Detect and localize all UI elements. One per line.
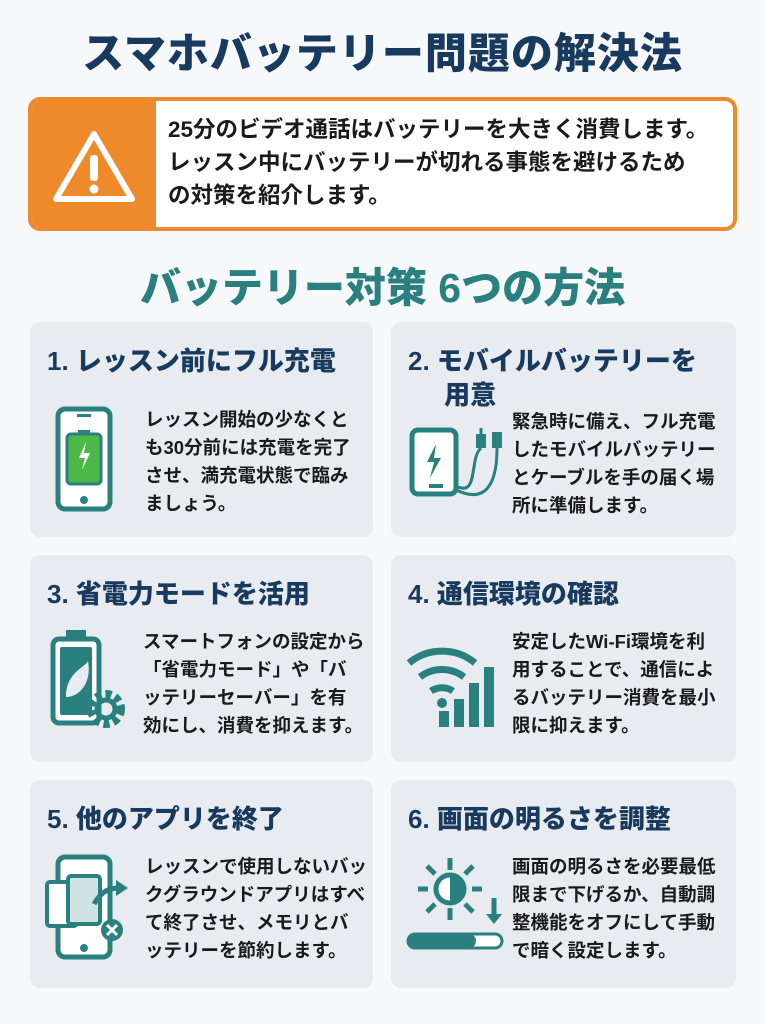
panel: 1 full charge: 1. レッスン前にフル充電 bbox=[47, 346, 336, 376]
callout: warning bbox=[28, 97, 737, 231]
text: 用することで、通信によ bbox=[512, 659, 714, 680]
text bbox=[512, 856, 716, 961]
icon: brightness down bbox=[406, 858, 504, 950]
text: るバッテリー消費を最小 bbox=[512, 687, 716, 708]
text: 限まで下げるか、自動調 bbox=[512, 884, 715, 905]
text: とケーブルを手の届く場 bbox=[512, 467, 714, 488]
text: も30分前には充電を完了 bbox=[145, 437, 351, 458]
text bbox=[512, 631, 716, 736]
text bbox=[143, 631, 364, 736]
panel: 2 mobile battery: 用意 bbox=[444, 380, 496, 410]
callout text bbox=[168, 117, 708, 208]
panel: 6 brightness bbox=[391, 780, 736, 988]
text: レッスンで使用しないバッ bbox=[145, 856, 367, 877]
text: したモバイルバッテリー bbox=[512, 439, 716, 460]
text bbox=[145, 856, 367, 961]
panel: 1 full charge bbox=[30, 322, 373, 537]
callout text: レッスン中にバッテリーが切れる事態を避けるため bbox=[168, 150, 686, 175]
text: 緊急時に備え、フル充電 bbox=[512, 411, 716, 432]
icon: phone apps close bbox=[45, 854, 128, 960]
text: 限に抑えます。 bbox=[512, 715, 640, 736]
text: ましょう。 bbox=[145, 493, 236, 514]
text: 画面の明るさを必要最低 bbox=[512, 856, 716, 877]
text: ッテリーセーバー」を有 bbox=[143, 687, 346, 708]
subtitle: バッテリー対策 6つの方法 bbox=[140, 265, 625, 311]
callout text: 25分のビデオ通話はバッテリーを大きく消費します。 bbox=[168, 117, 708, 142]
panel: 5 close apps: 5. 他のアプリを終了 bbox=[47, 804, 284, 834]
callout text: の対策を紹介します。 bbox=[168, 183, 391, 208]
panel: 4 network bbox=[391, 555, 736, 762]
text: スマートフォンの設定から bbox=[143, 631, 364, 652]
text: 「省電力モード」や「バ bbox=[143, 659, 347, 680]
text: 安定したWi-Fi環境を利 bbox=[512, 631, 705, 652]
text: レッスン開始の少なくと bbox=[145, 409, 349, 430]
text: 効にし、消費を抑えます。 bbox=[143, 715, 363, 736]
icon: phone battery bbox=[56, 406, 112, 512]
text: クグラウンドアプリはすべ bbox=[145, 884, 365, 905]
title: スマホバッテリー問題の解決法 bbox=[82, 30, 683, 77]
text: て終了させ、メモリとバ bbox=[145, 912, 349, 933]
panel: 3 power saving: 3. 省電力モードを活用 bbox=[47, 579, 310, 609]
panel: 5 close apps bbox=[30, 780, 373, 988]
text bbox=[512, 411, 716, 516]
text: 整機能をオフにして手動 bbox=[512, 912, 715, 933]
text: ッテリーを節約します。 bbox=[145, 940, 347, 961]
panel: 6 brightness: 6. 画面の明るさを調整 bbox=[408, 804, 671, 834]
panel: 3 power saving bbox=[30, 555, 373, 762]
panel: 2 mobile battery bbox=[391, 322, 736, 537]
icon: battery leaf gear bbox=[50, 630, 125, 728]
icon: warning triangle bbox=[53, 131, 135, 202]
icon: wifi signal bbox=[406, 648, 494, 727]
panel: 2 mobile battery: 2. モバイルバッテリーを bbox=[408, 346, 697, 376]
icon: power bank bbox=[410, 428, 502, 496]
text: 所に準備します。 bbox=[512, 495, 658, 516]
text bbox=[145, 409, 351, 514]
text: させ、満充電状態で臨み bbox=[145, 465, 349, 486]
panel: 4 network: 4. 通信環境の確認 bbox=[408, 579, 619, 609]
text: で暗く設定します。 bbox=[512, 940, 677, 961]
